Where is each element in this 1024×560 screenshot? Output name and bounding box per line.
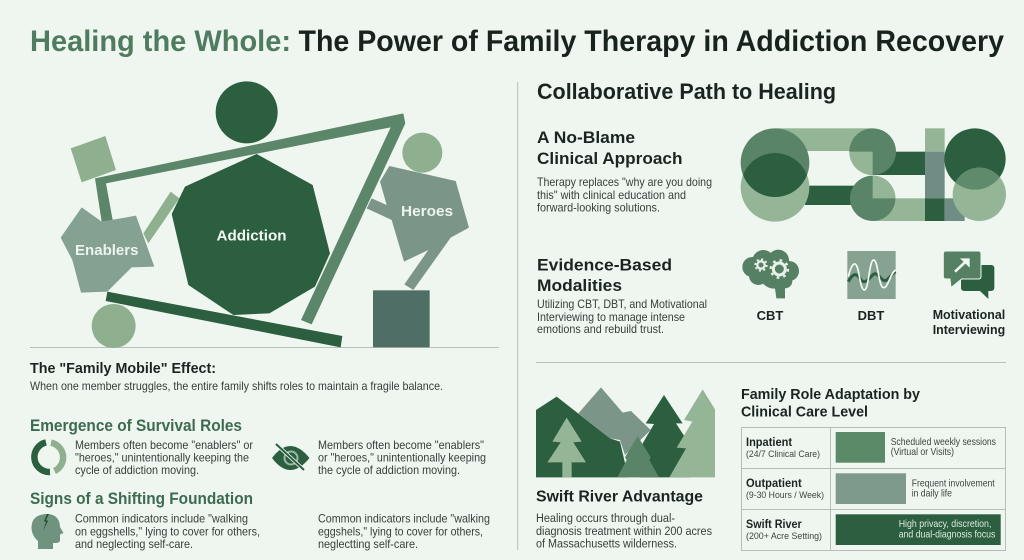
text block: swift river advantage: Healing occurs through dual- [536, 511, 675, 525]
text block: family mobile effect: The "Family Mobile" Effect: [30, 361, 216, 377]
text block: evidence-based modalities: emotions and rebuild trust. [537, 322, 664, 336]
row: inpatient: Inpatient [746, 435, 792, 449]
survival roles text left: Members often become "enablers" or [75, 438, 253, 452]
row: swift river: Swift River [746, 517, 802, 531]
addiction octagon [172, 154, 330, 315]
diagram: overlapping circles and bars [741, 128, 1006, 222]
label: heroes: Heroes [401, 203, 453, 220]
text block: no-blame approach [537, 128, 712, 214]
heading: Signs of a Shifting Foundation [30, 489, 253, 508]
row: outpatient: Outpatient [746, 476, 802, 490]
heading: Emergence of Survival Roles [30, 416, 242, 435]
light strut [143, 192, 179, 243]
text block: evidence-based modalities: Modalities [537, 276, 622, 295]
survival roles text right [318, 438, 486, 477]
label: DBT: DBT [858, 308, 884, 323]
title: The Power of Family Therapy in Addiction Recovery [298, 25, 1004, 58]
text block: evidence-based modalities: Interviewing to manage intense [537, 310, 685, 324]
section: emergence of survival roles [30, 416, 486, 477]
row: inpatient: (24/7 Clinical Care) [746, 449, 820, 460]
frame bars [95, 113, 405, 324]
label: enablers: Enablers [75, 242, 138, 259]
survival roles text left: cycle of addiction moving. [75, 463, 199, 477]
text block: evidence-based modalities: Utilizing CBT, DBT, and Motivational [537, 297, 707, 311]
heroes shape [367, 166, 469, 290]
text block: family mobile effect [30, 361, 443, 393]
row: inpatient: (Virtual or Visits) [891, 447, 954, 458]
base block [373, 290, 430, 347]
heroes head [402, 133, 442, 173]
row: inpatient [746, 432, 996, 463]
row: swift river: and dual-diagnosis focus [899, 530, 995, 541]
light square [71, 136, 116, 182]
text block: no-blame approach: Therapy replaces "why are you doing [537, 175, 712, 189]
text block: no-blame approach: Clinical Approach [537, 149, 682, 168]
lower beam [106, 292, 342, 347]
row: swift river: (200+ Acre Setting) [746, 531, 822, 542]
text block: evidence-based modalities [537, 256, 707, 336]
foundation text left: Common indicators include "walking [75, 512, 248, 526]
heading: family role adaptation: Clinical Care Level [741, 404, 868, 420]
survival roles text right: Members often become "enablers" [318, 438, 484, 452]
icon: ring [34, 442, 63, 472]
survival roles text right: or "heroes," unintentionally keeping [318, 450, 486, 464]
foundation text right [318, 512, 490, 551]
label: motivational interviewing: Motivational [933, 307, 1005, 322]
row: swift river: High privacy, discretion, [899, 519, 991, 530]
row: inpatient: Scheduled weekly sessions [891, 437, 996, 448]
row: outpatient: in daily life [912, 489, 952, 500]
icon: chat bubbles [943, 251, 994, 299]
icon: cracked head [32, 514, 64, 549]
top circle [216, 81, 278, 143]
table: care levels [742, 428, 1006, 550]
text block: no-blame approach: A No-Blame [537, 128, 635, 147]
label: motivational interviewing [933, 307, 1005, 337]
section: signs of a shifting foundation [30, 489, 490, 551]
enablers shape [61, 207, 154, 293]
text block: swift river advantage: diagnosis treatment within 200 acres [536, 524, 712, 538]
foundation text right: eggshels," lying to cover for others, [318, 524, 483, 538]
survival roles text left: "heroes," unintentionally keeping the [75, 450, 249, 464]
row: outpatient: Frequent involvement [912, 479, 995, 490]
title: Healing the Whole: [30, 25, 291, 58]
heading: family role adaptation: Family Role Adaptation by [741, 386, 921, 403]
row: outpatient [746, 473, 995, 504]
survival roles text left [75, 438, 253, 477]
label: addiction: Addiction [216, 228, 286, 244]
text block: no-blame approach: this" with clinical education and [537, 188, 686, 202]
foundation text right: neglectting self-care. [318, 537, 418, 551]
foundation text left [75, 512, 260, 551]
text block: family mobile effect: When one member struggles, the entire family shifts roles to maintain a fragile balance. [30, 379, 443, 393]
label: motivational interviewing: Interviewing [933, 322, 1005, 337]
text block: evidence-based modalities: Evidence-Based [537, 256, 672, 274]
row: outpatient: (9-30 Hours / Week) [746, 490, 824, 501]
label: CBT: CBT [757, 308, 783, 323]
heading: family role adaptation [741, 386, 921, 420]
heading: collaborative path: Collaborative Path to Healing [537, 79, 836, 104]
text block: swift river advantage: of Massachusetts wilderness. [536, 536, 677, 550]
illustration: mountains and trees [536, 387, 715, 477]
icon: brain with gears [742, 250, 799, 298]
survival roles text right: the cycle of addiction moving. [318, 463, 460, 477]
text block: swift river advantage: Swift River Advantage [536, 488, 703, 506]
row: swift river [746, 514, 1001, 545]
foundation text left: on eggshells," lying to cover for others, [75, 524, 260, 538]
lower circle [92, 304, 136, 348]
diagram: family mobile [30, 81, 499, 348]
foundation text left: and neglecting self-care. [75, 537, 193, 551]
icon: DBT wave [847, 251, 896, 299]
text block: swift river advantage [536, 488, 712, 550]
icon: crossed eye [272, 444, 310, 470]
text block: no-blame approach: forward-looking solutions. [537, 200, 660, 214]
foundation text right: Common indicators include "walking [318, 512, 490, 526]
